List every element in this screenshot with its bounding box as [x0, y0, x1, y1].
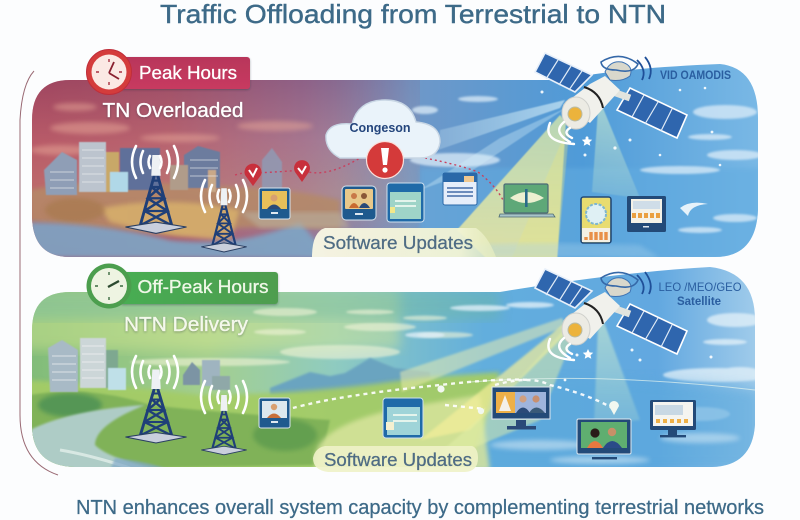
icon: browser window	[383, 398, 423, 438]
icon: tower 1 signal	[132, 146, 178, 178]
icon: satellite signal arcs	[637, 57, 651, 80]
icon: location pin c	[609, 401, 619, 415]
label: LEO/MEO/GEO satellite: Satellite	[677, 296, 721, 308]
icon: tower 2 signal	[201, 180, 247, 212]
icon: laptop	[499, 184, 555, 217]
stars	[540, 87, 721, 166]
label: congestion: Congeson	[349, 121, 411, 135]
icon: screen presenter	[259, 398, 290, 428]
icon: monitor dashboard	[650, 400, 696, 437]
icon: tower 3 signal	[132, 356, 178, 388]
label: software updates: Software Updates	[323, 233, 473, 253]
icon: tower 3	[126, 370, 186, 443]
badge: peak hours	[86, 50, 250, 94]
river	[32, 404, 152, 467]
label: software updates	[312, 228, 496, 257]
icon: monitor dashboard	[627, 196, 666, 232]
icon: cloud	[326, 100, 440, 158]
icon: map pin 2	[294, 160, 310, 182]
icon: tower 2	[201, 188, 247, 252]
label: LEO/MEO/GEO satellite	[658, 280, 742, 308]
icon: location pin b	[478, 408, 484, 414]
icon: satellite	[535, 269, 687, 360]
sky clouds left	[30, 103, 313, 155]
icon: map pin 1	[244, 164, 262, 186]
panel: peak hours	[20, 50, 770, 265]
caption: NTN enhances overall system capacity by complementing terrestrial networks	[76, 497, 764, 519]
icon: tablet	[581, 197, 611, 243]
stars	[564, 348, 712, 381]
badge: peak hours: Peak Hours	[139, 62, 237, 83]
label: software updates	[313, 446, 478, 472]
sea	[664, 376, 755, 467]
badge: off-peak hours: Off-Peak Hours	[138, 276, 268, 297]
icon: screen people	[342, 186, 376, 220]
icon: satellite signal arcs	[637, 272, 651, 294]
ground and water	[30, 182, 340, 236]
heading: TN overloaded: TN Overloaded	[102, 100, 244, 122]
badge: off-peak hours	[86, 264, 278, 308]
sea band right	[420, 168, 760, 258]
mountains	[270, 358, 430, 395]
icon: tower 1	[126, 155, 186, 233]
icon: browser window	[387, 183, 424, 222]
water swirl	[490, 242, 656, 257]
left bracket	[20, 71, 58, 475]
icon: document screen	[443, 173, 477, 205]
city buildings	[44, 142, 282, 195]
panel: off-peak hours	[20, 262, 773, 477]
beams	[420, 100, 640, 262]
dashed delivery path	[293, 380, 612, 409]
heading: NTN delivery: NTN Delivery	[124, 314, 248, 336]
dotted path	[235, 155, 503, 200]
icon: alert	[366, 142, 404, 178]
icon: satellite	[535, 53, 687, 144]
land	[25, 372, 500, 470]
label: software updates: Software Updates	[324, 450, 472, 470]
city buildings	[48, 338, 230, 392]
icon: monitor team	[492, 387, 550, 430]
right land	[315, 395, 490, 470]
icon: tower 4	[201, 395, 247, 455]
icon: location pin a	[437, 385, 445, 393]
icon: screen presenter	[259, 188, 290, 219]
icon: tower 4 signal	[201, 381, 247, 413]
label: LEO/MEO/GEO satellite: LEO /MEO/GEO	[658, 280, 742, 294]
icon: monitor video call	[577, 419, 631, 459]
label: satellite: VID OAMODIS	[660, 68, 731, 82]
beams	[399, 317, 640, 446]
